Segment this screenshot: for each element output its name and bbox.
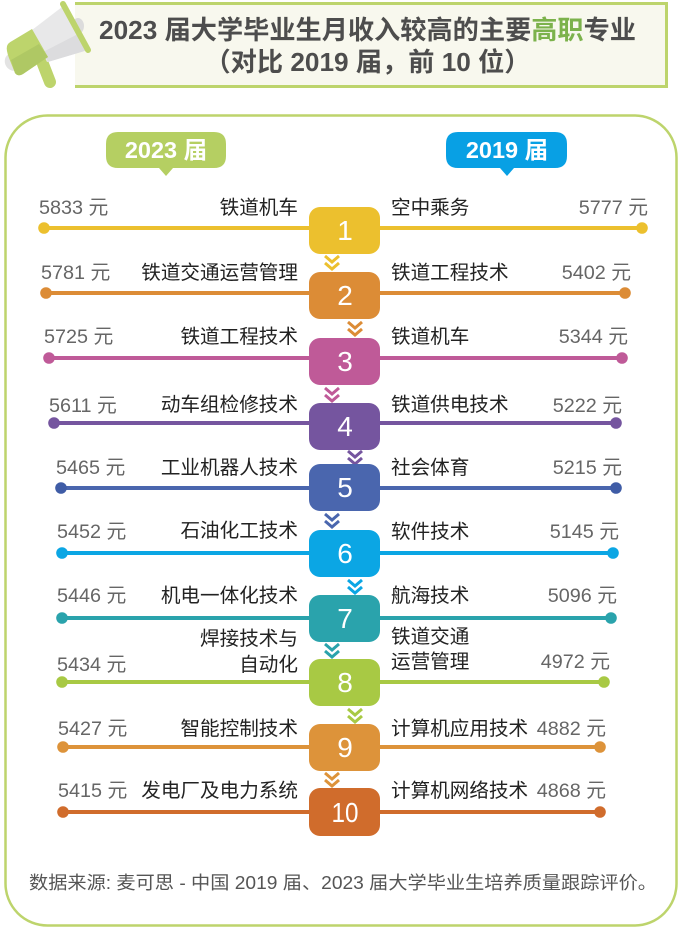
row 10: 4868 元 [537,780,606,802]
row 4: 4 [337,411,353,442]
row 7: 7 [337,603,353,634]
badge: 2023: 2023 届 [125,137,207,163]
row 10: 10 [332,797,358,828]
row 6: 5145 元 [550,521,619,543]
source note: 数据来源: 麦可思 - 中国 2019 届、2023 届大学毕业生培养质量跟踪评价。 [29,873,657,893]
row 10: 发电厂及电力系统 [141,780,298,802]
row 9: 5427 元 [58,718,127,740]
row 2: 5402 元 [562,262,631,284]
badge: 2019: 2019 届 [466,137,548,163]
row 6: 石油化工技术 [180,520,298,542]
row 10: 5415 元 [58,780,127,802]
row 2 [40,262,631,335]
row 8: 8 [337,667,353,698]
row 10 [57,780,606,836]
title subtitle: （对比 2019 届，前 10 位） [204,47,530,77]
row 4: 动车组检修技术 [161,394,298,416]
row 1: 空中乘务 [391,197,469,219]
row 1 [38,197,648,269]
row 9 [57,718,606,786]
row 4: 铁道供电技术 [391,394,509,416]
row 6: 软件技术 [391,521,469,543]
badge: 2019 [446,132,567,176]
row 6: 5452 元 [57,521,126,543]
row 2: 2 [337,280,353,311]
row 3: 铁道机车 [391,326,469,348]
row 5: 5465 元 [56,457,125,479]
row 8: 运营管理 [391,651,469,673]
row 1: 铁道机车 [220,197,298,219]
row 4: 5611 元 [49,395,117,417]
row 5: 工业机器人技术 [161,457,298,479]
row 3: 5344 元 [559,326,628,348]
row 9: 智能控制技术 [180,718,298,740]
row 8: 自动化 [239,654,298,676]
row 4: 5222 元 [553,395,622,417]
row 8 [56,626,610,722]
title text: 2023 届大学毕业生月收入较高的主要高职专业 [99,15,636,45]
row 8: 4972 元 [541,651,610,673]
row 2: 铁道工程技术 [391,262,509,284]
row 9: 9 [337,732,353,763]
icon: megaphone [2,4,88,82]
row 2: 5781 元 [41,262,110,284]
row 9: 计算机应用技术 [391,718,528,740]
row 2: 铁道交通运营管理 [141,262,298,284]
row 9: 4882 元 [537,718,606,740]
row 3 [43,326,628,401]
row 6 [56,520,619,593]
row 8: 铁道交通 [391,626,469,648]
row 4 [48,394,622,464]
row 3: 3 [337,346,353,377]
row 7: 机电一体化技术 [161,585,298,607]
row 1: 1 [337,215,353,246]
row 7: 5096 元 [548,585,617,607]
row 8: 焊接技术与 [200,628,298,650]
badge: 2023 [106,132,226,176]
row 5: 5 [337,472,353,503]
row 1: 5833 元 [39,197,108,219]
row 6: 6 [337,538,353,569]
row 3: 铁道工程技术 [180,326,298,348]
row 7: 5446 元 [57,585,126,607]
row 5 [55,457,622,527]
row 10: 计算机网络技术 [391,780,528,802]
row 8: 5434 元 [57,654,126,676]
row 5: 5215 元 [553,457,622,479]
row 7: 航海技术 [391,585,469,607]
row 5: 社会体育 [391,457,469,479]
title banner [75,2,668,88]
row 3: 5725 元 [44,326,113,348]
row 7 [56,585,617,657]
row 1: 5777 元 [579,197,648,219]
